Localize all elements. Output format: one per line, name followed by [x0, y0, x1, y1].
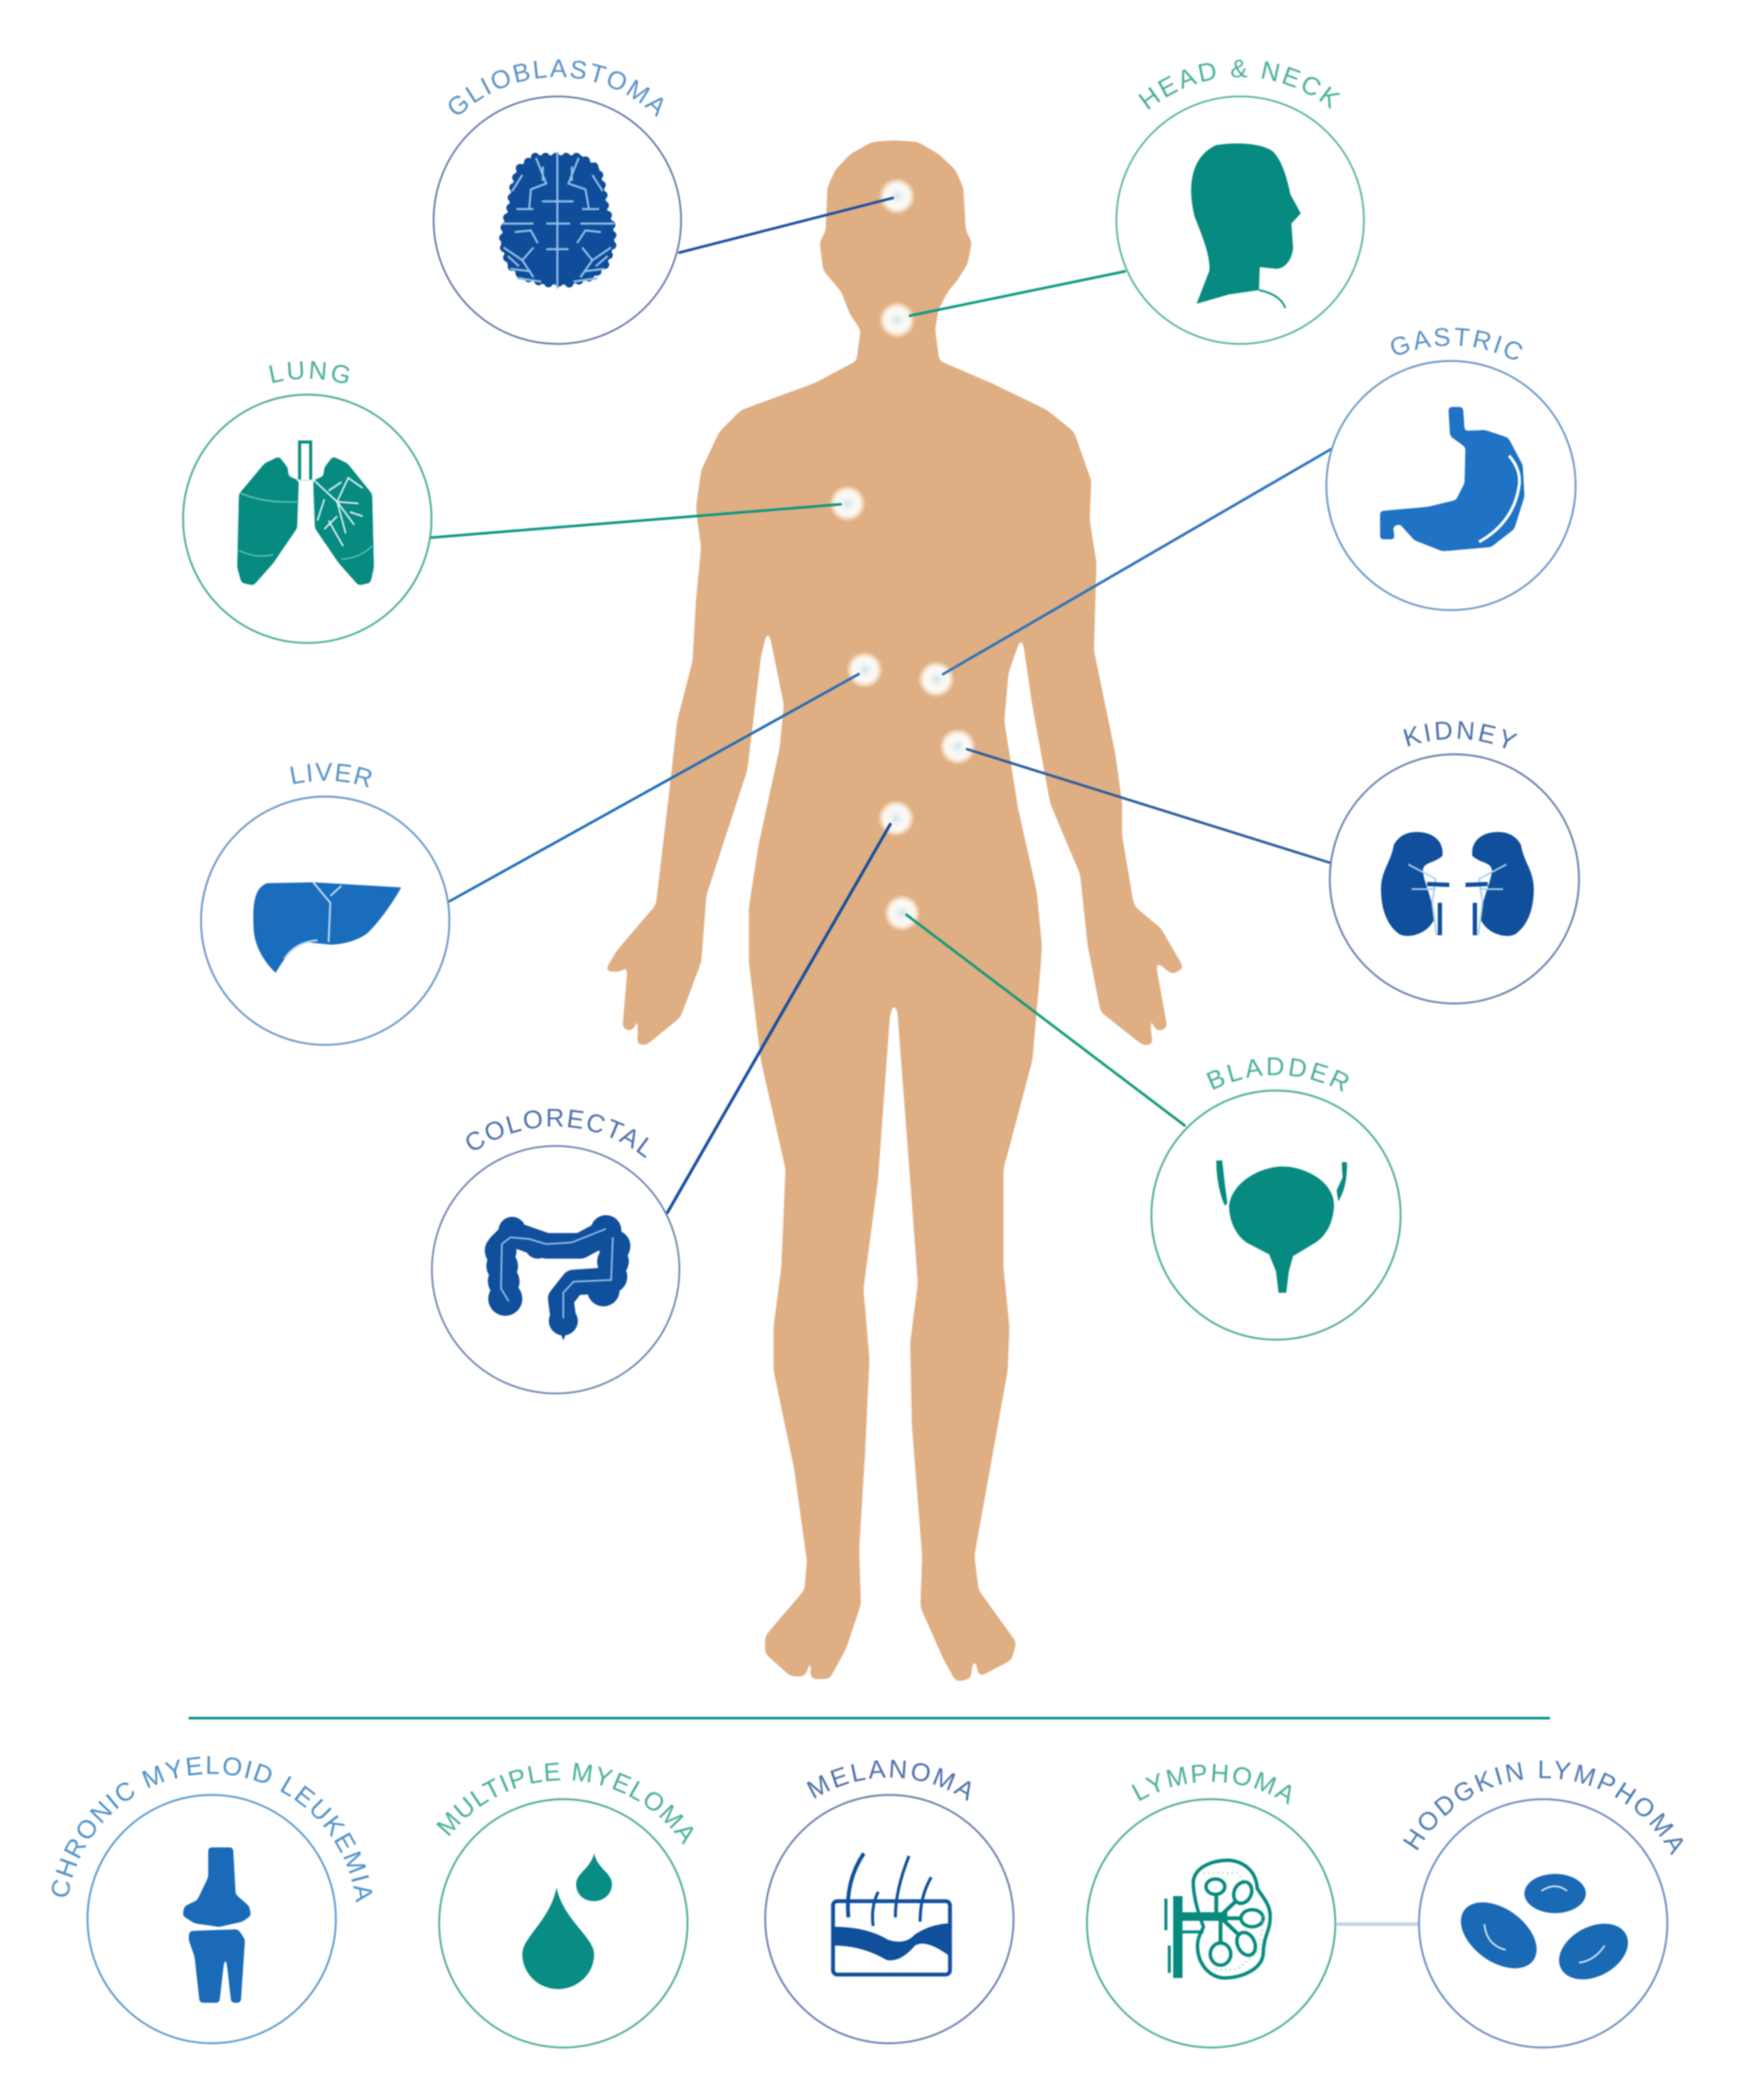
icon: bladder	[1216, 1161, 1347, 1293]
label: glioblastoma: GLIOBLASTOMA	[448, 58, 664, 118]
icon: lymph node	[1166, 1860, 1270, 1978]
panel: bladder	[1149, 1056, 1403, 1341]
label: colorectal: COLORECTAL	[466, 1108, 650, 1159]
panel: colorectal	[430, 1108, 681, 1395]
panel: melanoma	[763, 1759, 1016, 2045]
panel: lymphoma	[1085, 1763, 1337, 2050]
connector lines from body to circles	[431, 198, 1331, 1213]
icon: knee joint	[183, 1847, 251, 2003]
panel: lung	[181, 360, 434, 645]
panel: hodgkin lymphoma	[1402, 1760, 1684, 2050]
icon: stomach	[1380, 407, 1524, 551]
label: melanoma: MELANOMA	[806, 1759, 971, 1802]
label: kidney: KIDNEY	[1403, 720, 1518, 749]
icon: head profile	[1192, 143, 1301, 308]
icon: liver	[253, 882, 401, 973]
panel: chronic myeloid leukemia	[51, 1755, 373, 2045]
panel: gastric	[1325, 327, 1577, 613]
panel: multiple myeloma	[435, 1761, 695, 2050]
label: multiple myeloma: MULTIPLE MYELOMA	[435, 1761, 695, 1845]
icon: lungs	[237, 442, 374, 585]
label: liver: LIVER	[289, 762, 372, 788]
label: bladder: BLADDER	[1205, 1056, 1349, 1092]
icon: skin layers	[833, 1853, 950, 1975]
panel: head and neck	[1115, 59, 1366, 346]
icon: blood cells	[1448, 1874, 1638, 1991]
human body silhouette	[607, 142, 1182, 1680]
connector: lymphoma to hodgkin lymphoma	[1336, 1923, 1419, 1926]
icon: colon	[488, 1215, 621, 1341]
icon: brain	[502, 152, 615, 288]
panel: liver	[200, 762, 451, 1047]
label: hodgkin lymphoma: HODGKIN LYMPHOMA	[1402, 1760, 1684, 1856]
label: chronic myeloid leukemia: CHRONIC MYELOID LEUKEMIA	[51, 1755, 373, 1903]
icon: blood drops	[522, 1853, 612, 1989]
label: lymphoma: LYMPHOMA	[1131, 1763, 1292, 1806]
label: head and neck: HEAD & NECK	[1138, 59, 1341, 110]
divider line	[189, 1717, 1550, 1719]
label: gastric: GASTRIC	[1390, 327, 1523, 360]
icon: kidneys	[1381, 832, 1534, 936]
panel: glioblastoma	[432, 58, 683, 346]
panel: kidney	[1328, 720, 1581, 1005]
label: lung: LUNG	[268, 360, 350, 384]
tumour site markers	[828, 177, 977, 933]
